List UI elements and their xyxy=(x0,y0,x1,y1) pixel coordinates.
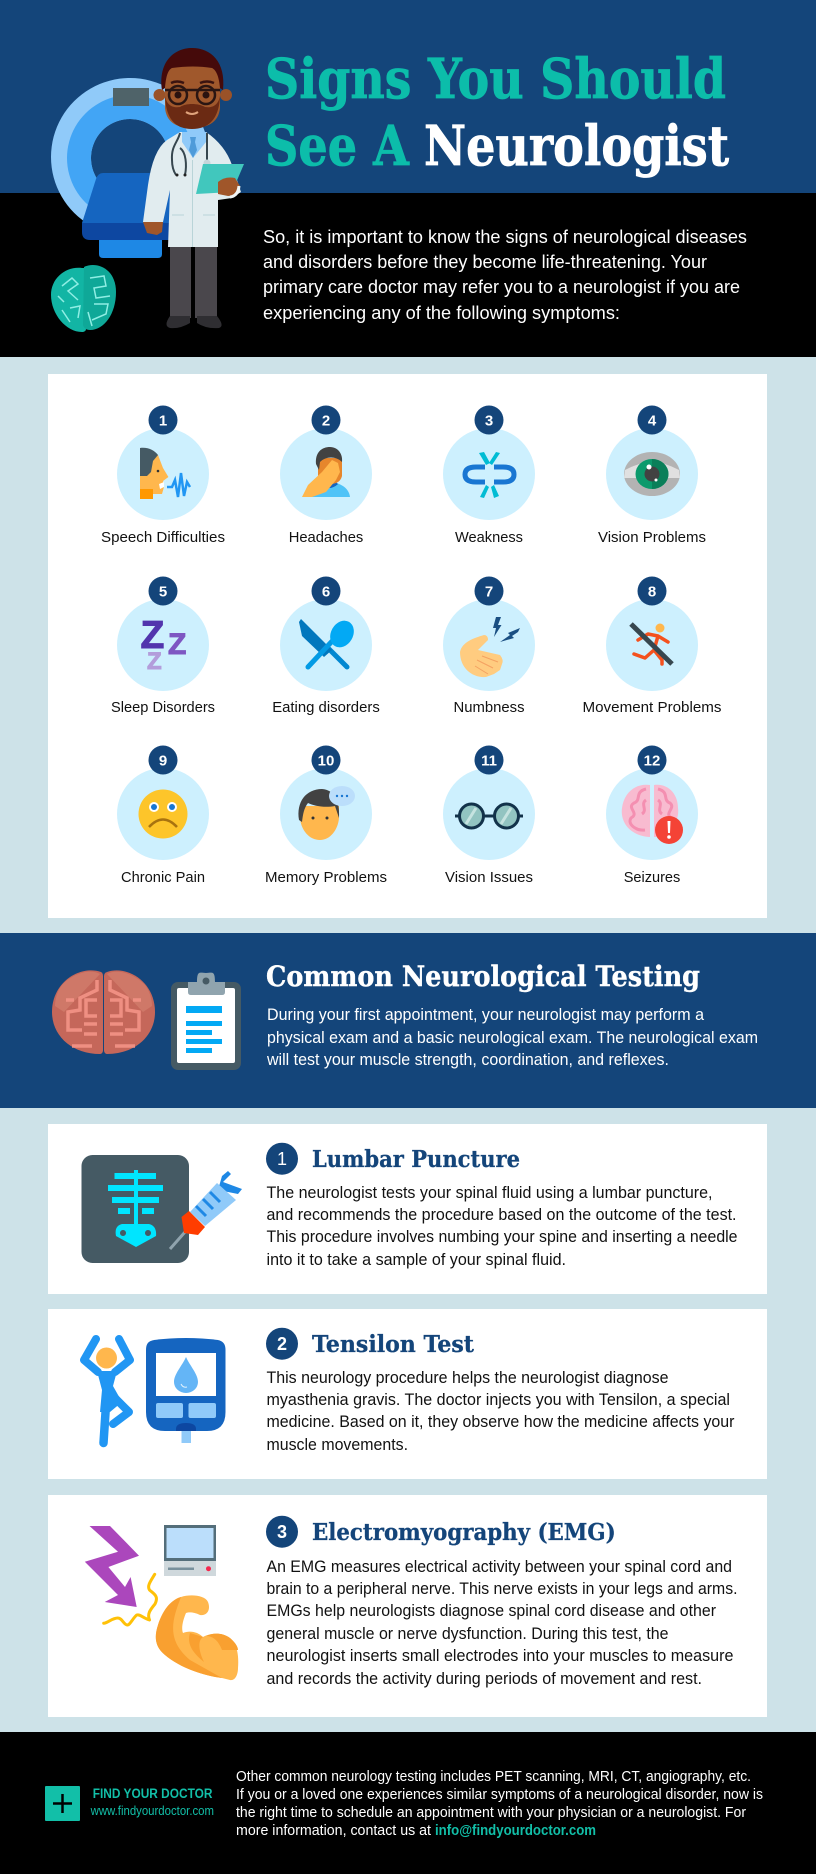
title: Tensilon Test xyxy=(312,1331,474,1358)
icon: MRI scanner xyxy=(51,78,209,258)
symptom 4: vision problems: 4 xyxy=(648,412,657,430)
body text xyxy=(266,1557,738,1688)
symptom 7: numbness: Numbness xyxy=(454,699,524,716)
intro text: experiencing any of the following symptoms: xyxy=(263,303,620,323)
symptom 5: sleep disorders xyxy=(111,576,215,716)
badge: 3 xyxy=(277,1522,287,1542)
symptom 8: movement problems: 8 xyxy=(648,584,656,600)
symptom 9: chronic pain: 9 xyxy=(159,752,167,770)
icon: red brain xyxy=(52,970,155,1054)
symptom 5: sleep disorders: Z xyxy=(140,614,164,657)
badge: 2 xyxy=(277,1334,287,1354)
icon: doctor xyxy=(143,48,244,328)
icon: spine x-ray and syringe xyxy=(82,1155,242,1263)
icon: teal brain xyxy=(51,265,116,332)
footer text: the right time to schedule an appointment with your physician or a neurologist. For xyxy=(236,1805,746,1821)
icon: lightning bolt xyxy=(85,1526,139,1607)
body text xyxy=(266,1183,738,1269)
hands xyxy=(143,222,163,235)
intro text: primary care doctor may refer you to a neurologist if you are xyxy=(263,277,740,297)
trousers xyxy=(170,245,217,318)
body text: and records the activity during periods of movement and rest. xyxy=(266,1669,702,1688)
heading: Common Neurological Testing xyxy=(266,960,700,993)
symptom 2: headaches: Headaches xyxy=(289,529,363,546)
brand name: FIND YOUR DOCTOR xyxy=(93,1786,213,1801)
symptom 5: sleep disorders: 5 xyxy=(159,584,167,600)
body text: will test your muscle strength, coordination, and reflexes. xyxy=(266,1050,669,1069)
icon: flexed arm xyxy=(156,1595,238,1680)
body text: This neurology procedure helps the neurologist diagnose xyxy=(266,1368,668,1387)
body text: medicine. Based on it, they observe how the medicine affects your xyxy=(266,1412,735,1431)
symptom 1: speech difficulties: 1 xyxy=(159,412,167,430)
symptom 9: chronic pain xyxy=(117,746,209,886)
symptom 2: headaches xyxy=(280,406,372,546)
symptom 10: memory problems xyxy=(265,746,387,886)
symptom 12: seizures: 12 xyxy=(644,752,660,770)
shirt and tie xyxy=(182,132,206,158)
symptom 7: numbness xyxy=(443,576,535,716)
badge: 1 xyxy=(277,1149,287,1169)
title: Lumbar Puncture xyxy=(312,1146,520,1173)
panel: tensilon test xyxy=(48,1309,767,1479)
intro text: and disorders before they become life-threatening. Your xyxy=(263,252,707,272)
symptom 6: eating disorders: 6 xyxy=(322,584,330,600)
icon: glucose meter xyxy=(146,1338,226,1443)
symptom 8: movement problems: Movement Problems xyxy=(582,699,722,716)
brand name xyxy=(90,1786,214,1818)
footer xyxy=(0,1732,816,1874)
symptom 5: sleep disorders: Z xyxy=(168,628,186,661)
intro text xyxy=(263,227,747,323)
symptom 8: movement problems xyxy=(582,576,722,716)
symptom 9: chronic pain: Chronic Pain xyxy=(121,869,205,886)
symptom 12: seizures xyxy=(606,746,698,886)
footer text: info@findyourdoctor.com xyxy=(435,1823,596,1839)
symptom 11: vision issues: Vision Issues xyxy=(445,869,533,886)
symptom 12: seizures: Seizures xyxy=(624,869,680,886)
symptom 11: vision issues: 11 xyxy=(481,752,497,770)
icon: yellow signal wave xyxy=(104,1574,156,1625)
title: Electromyography (EMG) xyxy=(312,1519,616,1546)
footer text: more information, contact us at xyxy=(236,1823,431,1839)
symptom 3: weakness: 3 xyxy=(485,412,493,430)
coat xyxy=(143,132,241,247)
stethoscope xyxy=(172,133,207,175)
intro text: So, it is important to know the signs of neurological diseases xyxy=(263,227,747,247)
body text: brain to a peripheral nerve. This nerve exists in your legs and arms. xyxy=(266,1579,738,1598)
hair and head xyxy=(154,89,166,101)
body text: into it to take a sample of your spinal fluid. xyxy=(266,1250,566,1269)
footer text xyxy=(236,1769,763,1839)
symptom 4: vision problems: Vision Problems xyxy=(598,529,706,546)
badge xyxy=(266,1143,298,1175)
symptom 6: eating disorders xyxy=(272,576,380,716)
body text: and recommends the procedure based on the outcome of the test. xyxy=(266,1205,736,1224)
body text: myasthenia gravis. The doctor injects you with Tensilon, a special xyxy=(266,1390,730,1409)
body text: An EMG measures electrical activity between your spinal cord and xyxy=(266,1557,732,1576)
badge xyxy=(266,1516,298,1548)
symptom 10: memory problems: 10 xyxy=(318,752,334,770)
symptom 1: speech difficulties: Speech Difficulties xyxy=(101,529,225,546)
symptom 2: headaches: 2 xyxy=(322,412,330,430)
body text: physical exam and a basic neurological exam. The neurological exam xyxy=(267,1028,758,1047)
icon: clipboard xyxy=(171,973,241,1070)
header panel xyxy=(0,0,816,357)
panel: lumbar puncture xyxy=(48,1124,767,1294)
symptom 11: vision issues xyxy=(443,746,535,886)
title: See A xyxy=(265,113,410,178)
body text: EMGs help neurologists diagnose spinal cord disease and other xyxy=(266,1601,716,1620)
body text: The neurologist tests your spinal fluid using a lumbar puncture, xyxy=(266,1183,712,1202)
panel: electromyography xyxy=(48,1495,767,1717)
symptom 3: weakness: Weakness xyxy=(455,529,523,546)
symptom 1: speech difficulties xyxy=(101,406,225,546)
badge xyxy=(266,1328,298,1360)
body text: This procedure involves numbing your spine and inserting a needle xyxy=(266,1227,738,1246)
body text xyxy=(266,1005,758,1069)
icon: monitor xyxy=(164,1525,216,1576)
symptom 4: vision problems xyxy=(598,406,706,546)
body text: muscle movements. xyxy=(266,1435,408,1454)
symptom 6: eating disorders: Eating disorders xyxy=(272,699,380,716)
footer text: If you or a loved one experiences similar symptoms of a neurological disorder, now is xyxy=(236,1787,763,1803)
title xyxy=(265,46,729,178)
icon: person balancing xyxy=(84,1339,130,1443)
symptom 7: numbness: 7 xyxy=(485,584,493,600)
body text: general muscle or nerve dysfunction. During this test, the xyxy=(266,1624,668,1643)
panel: symptoms xyxy=(48,374,767,918)
body text xyxy=(266,1368,735,1454)
symptom 5: sleep disorders: Sleep Disorders xyxy=(111,699,215,716)
symptom 10: memory problems: Memory Problems xyxy=(265,869,387,886)
title: Signs You Should xyxy=(265,46,726,111)
title: Neurologist xyxy=(424,113,729,178)
brand name: www.findyourdoctor.com xyxy=(90,1804,214,1818)
symptom 5: sleep disorders: Z xyxy=(147,648,162,675)
symptom 3: weakness xyxy=(443,406,535,546)
panel: common neurological testing xyxy=(0,933,816,1108)
logo xyxy=(45,1786,80,1821)
body text: During your first appointment, your neurologist may perform a xyxy=(267,1005,705,1024)
clipboard in hand xyxy=(196,164,244,194)
footer text: Other common neurology testing includes PET scanning, MRI, CT, angiography, etc. xyxy=(236,1769,751,1785)
body text: neurologist inserts small electrodes into your muscles to measure xyxy=(266,1646,734,1665)
